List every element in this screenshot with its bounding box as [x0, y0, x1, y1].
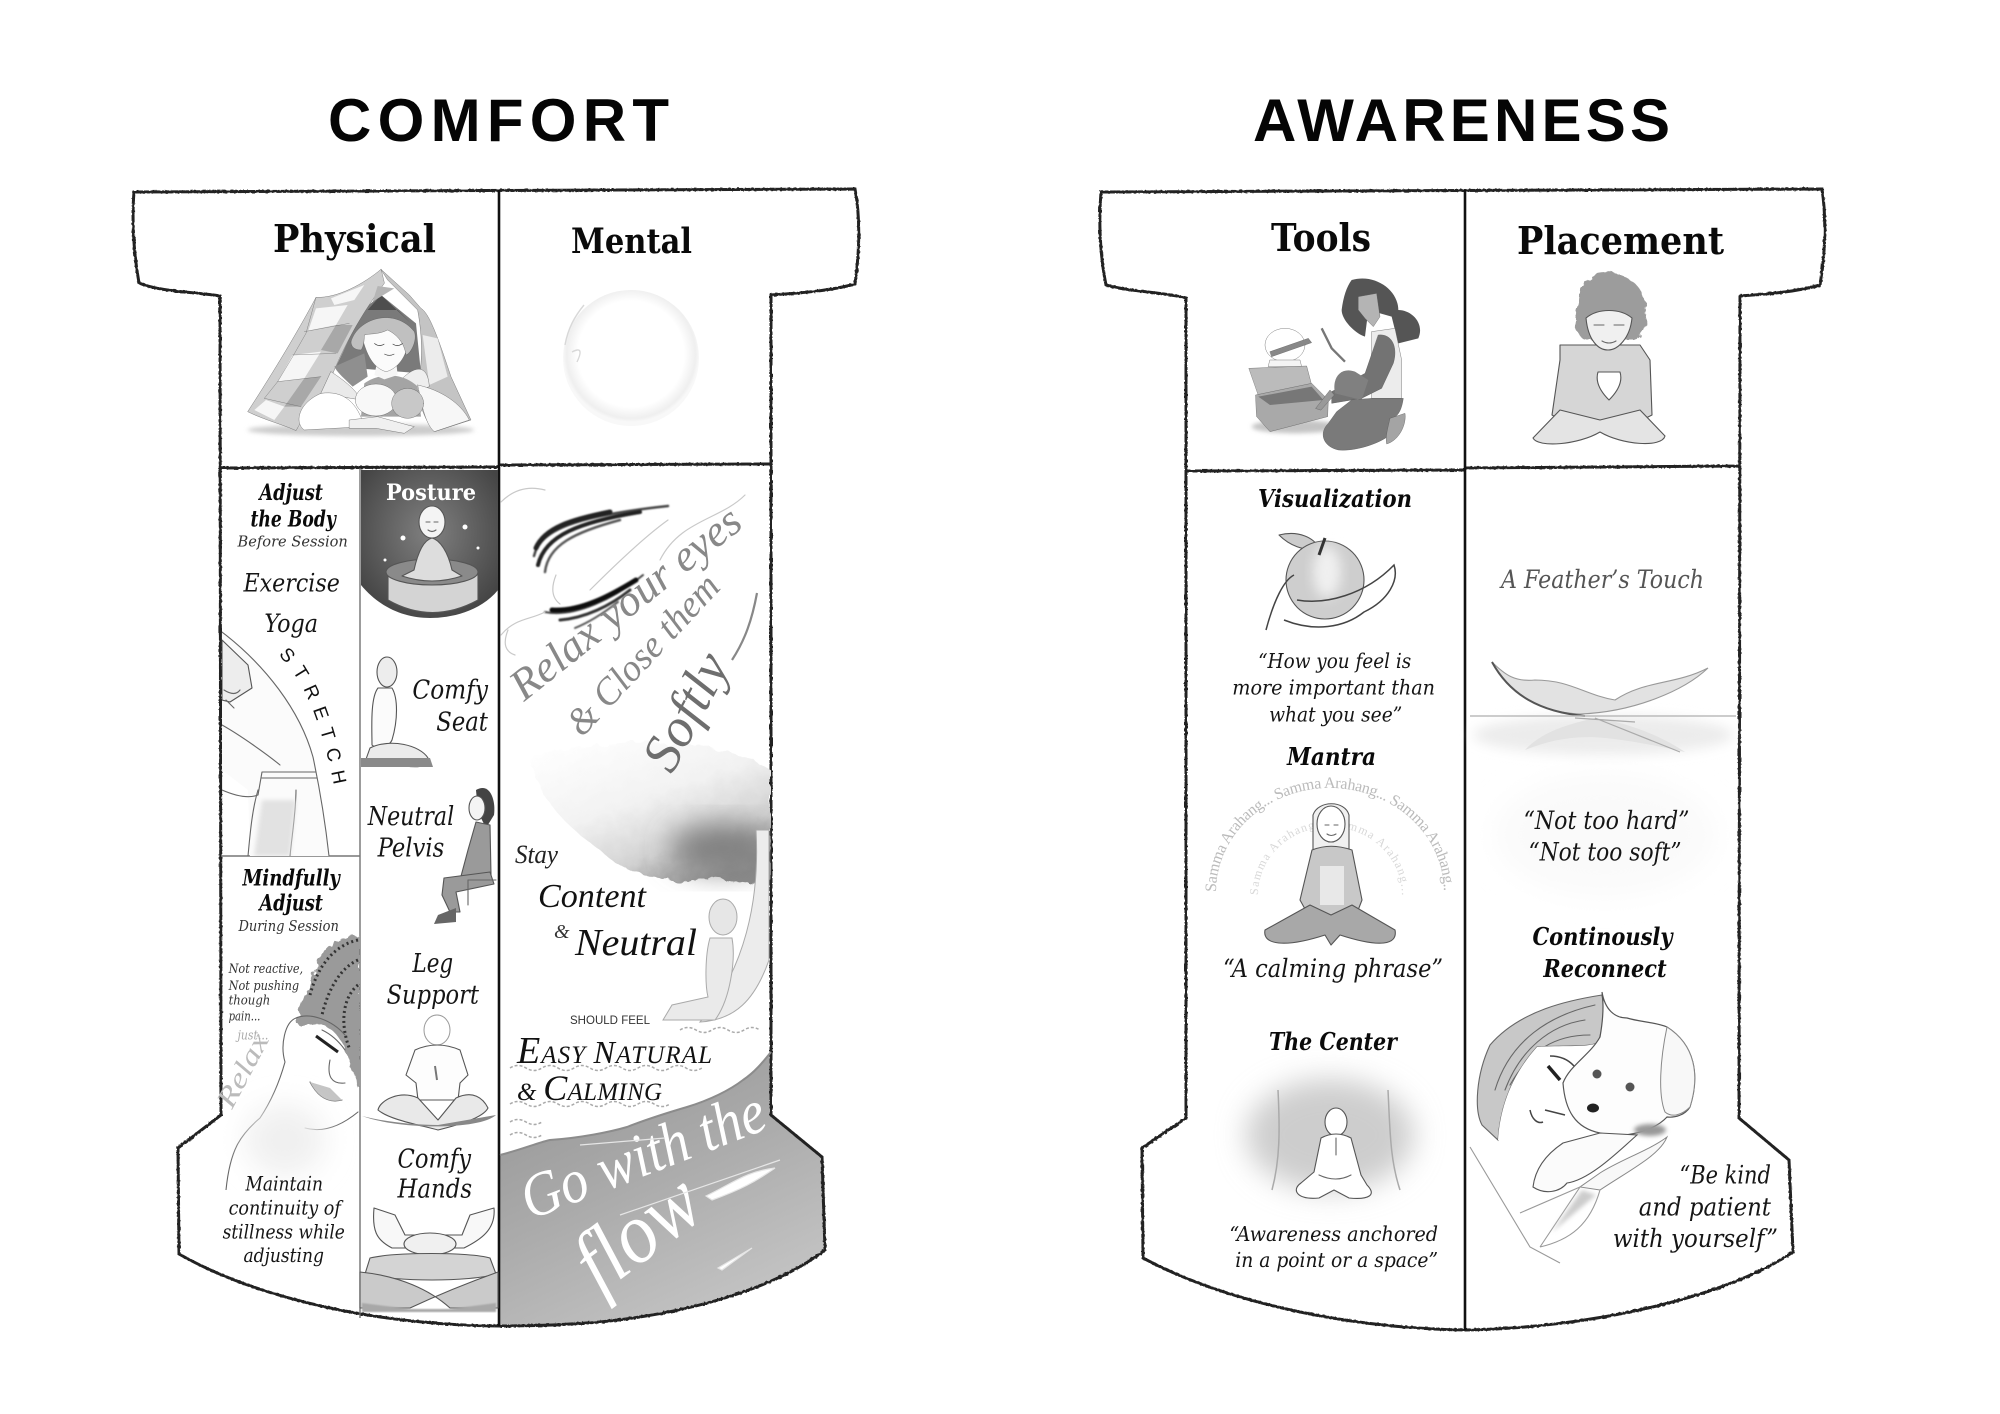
text: softly: Softly — [630, 642, 741, 781]
quote: awareness anchored: “Awareness anchored — [1229, 1222, 1438, 1246]
quote: awareness anchored — [1229, 1222, 1438, 1272]
text: maintain continuity — [223, 1173, 345, 1267]
caption: during session: During Session — [238, 917, 339, 935]
heading: adjust the body: Adjust — [258, 480, 323, 506]
cell: mindfully adjust — [210, 865, 360, 1267]
quote: not too hard not too soft — [1523, 806, 1689, 867]
text: not reactive: pain... — [229, 1010, 260, 1025]
water strokes — [580, 1138, 780, 1270]
figure: comfy seat — [361, 657, 488, 767]
text: go with the: Go with the — [511, 1077, 775, 1233]
cell: continously reconnect — [1470, 923, 1778, 1263]
icon: feather on water — [1470, 662, 1736, 895]
text: and close them: & Close them — [558, 566, 728, 744]
icon: woman resting eyes — [226, 935, 360, 1190]
text: a feather's touch: A Feather’s Touch — [1499, 565, 1704, 594]
text: leg support: Leg — [412, 949, 453, 979]
heading: mindfully adjust: Adjust — [258, 890, 323, 916]
panel: mental illustration — [499, 488, 780, 1310]
title: awareness: AWARENESS — [1253, 87, 1670, 154]
icon: seated meditator with hoodie — [1533, 273, 1665, 444]
text: content: Content — [538, 878, 648, 915]
heading: adjust the body: the Body — [250, 507, 337, 533]
quote: awareness anchored: in a point or a space” — [1235, 1248, 1438, 1272]
heading: mindfully adjust: Mindfully — [242, 865, 341, 891]
text: not reactive — [228, 962, 303, 1044]
heading: adjust the body — [250, 480, 337, 533]
grass texture — [510, 1028, 760, 1138]
decoration: mantra arcs — [1206, 777, 1452, 894]
quote: how you feel: what you see” — [1269, 702, 1402, 726]
text: yoga: Yoga — [264, 609, 318, 638]
text: comfy seat: Comfy — [412, 676, 488, 706]
icon: stretching girl — [222, 632, 329, 856]
text: maintain continuity: Maintain — [245, 1173, 323, 1196]
cell: visualization — [1232, 484, 1435, 726]
text: comfy hands: Comfy — [398, 1145, 471, 1175]
text: easy natural: EASY NATURAL — [516, 1030, 712, 1072]
text: comfy seat: Seat — [436, 707, 488, 737]
outline: awareness pillar — [1100, 189, 1825, 1330]
icon: soap bubble — [563, 290, 699, 426]
decoration: mantra arcs: Samma Arahang... Samma Arahang... Samma Arahang... — [1206, 777, 1452, 891]
cell: adjust the body — [222, 480, 348, 856]
quote: not too hard not too soft: “Not too hard” — [1523, 806, 1689, 835]
text: not reactive: just... — [235, 1029, 268, 1044]
quote: how you feel: “How you feel is — [1258, 649, 1411, 673]
icon: meditator with mantra — [1265, 804, 1395, 945]
text: stretch on arc: STRETCH — [280, 648, 346, 784]
heading: visualization: Visualization — [1258, 484, 1412, 513]
panel: comfort — [131, 87, 861, 1328]
heading: continously reconnect: Continously — [1532, 923, 1674, 951]
text: exercise: Exercise — [243, 568, 340, 597]
outline: comfort pillar — [133, 189, 859, 1326]
text: not reactive: Not pushing — [228, 979, 299, 994]
quote: a calming phrase: “A calming phrase” — [1223, 954, 1443, 983]
quote: how you feel — [1232, 649, 1435, 726]
icon: forest meditator — [1246, 1079, 1414, 1198]
heading: continously reconnect — [1532, 923, 1674, 983]
text: should feel: SHOULD FEEL — [570, 1013, 650, 1027]
icon: girl with toolbox and puppy — [1249, 279, 1420, 450]
icon: woman hugging puppy — [1470, 992, 1695, 1263]
text: leg support: Support — [387, 981, 480, 1011]
text: maintain continuity: stillness while — [223, 1220, 345, 1243]
quote: be kind: “Be kind — [1680, 1161, 1771, 1190]
text: not reactive: Not reactive, — [228, 962, 303, 977]
text: comfy seat — [412, 676, 488, 737]
text: not reactive: though — [229, 994, 270, 1009]
text: and calming: & CALMING — [517, 1068, 662, 1108]
illustration: closed eyes — [501, 488, 745, 655]
text: neutral: Neutral — [574, 922, 697, 964]
cell: a feather's touch — [1470, 565, 1736, 895]
illustration: dark crown shadow — [670, 824, 774, 872]
quote: be kind — [1613, 1161, 1778, 1253]
column divider: tools and placement — [1464, 190, 1466, 1330]
figure: seated man under tree — [663, 899, 737, 1020]
quote: be kind: and patient — [1639, 1192, 1772, 1221]
water band: go with the flow — [500, 1052, 825, 1326]
caption: before session: Before Session — [237, 533, 348, 551]
heading: mindfully adjust — [242, 865, 341, 916]
text: flow: flow — [554, 1152, 719, 1310]
illustration: tree crown — [530, 742, 771, 883]
cell: the center — [1229, 1027, 1438, 1272]
figure: comfy hands — [360, 1145, 498, 1312]
heading: mantra: Mantra — [1286, 742, 1376, 771]
text group: adjust the body labels — [237, 480, 348, 638]
decoration: mantra arcs: Samma Arahang... Samma Arahang... — [1250, 823, 1407, 894]
heading: continously reconnect: Reconnect — [1542, 955, 1667, 983]
text: comfy hands — [397, 1145, 472, 1205]
sub divider: adjust and posture — [359, 468, 361, 1318]
quote: be kind: with yourself” — [1613, 1224, 1778, 1253]
illustration: tree trunk — [700, 830, 769, 1022]
quote: how you feel: more important than — [1232, 676, 1435, 700]
text group: mindfully adjust labels — [223, 865, 345, 1267]
heading: tools: Tools — [1271, 215, 1371, 260]
heading: mental: Mental — [571, 221, 692, 262]
text: leg support — [387, 949, 480, 1011]
text: ampersand: & — [554, 921, 570, 943]
icon: apple in hand — [1266, 533, 1395, 630]
text: comfy hands: Hands — [397, 1175, 472, 1205]
icon: child under blanket tent — [248, 269, 474, 436]
cell: mantra — [1206, 742, 1452, 983]
figure: leg support — [362, 949, 496, 1130]
faint word: relax: Relax — [210, 1027, 276, 1114]
cell: posture — [361, 470, 498, 618]
text: maintain continuity: continuity of — [229, 1196, 344, 1219]
heading: posture: Posture — [386, 480, 476, 506]
illustration: monk on cushion in night sky — [361, 470, 498, 618]
text: maintain continuity: adjusting — [243, 1244, 324, 1267]
quote: not too hard not too soft: “Not too soft” — [1528, 838, 1682, 867]
figure: neutral pelvis — [367, 788, 496, 924]
softly swash — [732, 593, 757, 660]
title: comfort: COMFORT — [328, 87, 669, 154]
text: stay: Stay — [515, 840, 558, 869]
text: neutral pelvis: Neutral — [367, 802, 454, 832]
text: relax your eyes: Relax your eyes — [499, 496, 751, 710]
divider: before and during session — [221, 855, 360, 857]
heading: physical: Physical — [273, 216, 436, 261]
shoreline — [500, 1052, 771, 1155]
heading: placement: Placement — [1517, 218, 1724, 263]
text: neutral pelvis — [367, 802, 454, 864]
column divider: physical and mental — [498, 190, 500, 1326]
text: neutral pelvis: Pelvis — [377, 834, 444, 864]
heading: the center: The Center — [1269, 1027, 1399, 1056]
